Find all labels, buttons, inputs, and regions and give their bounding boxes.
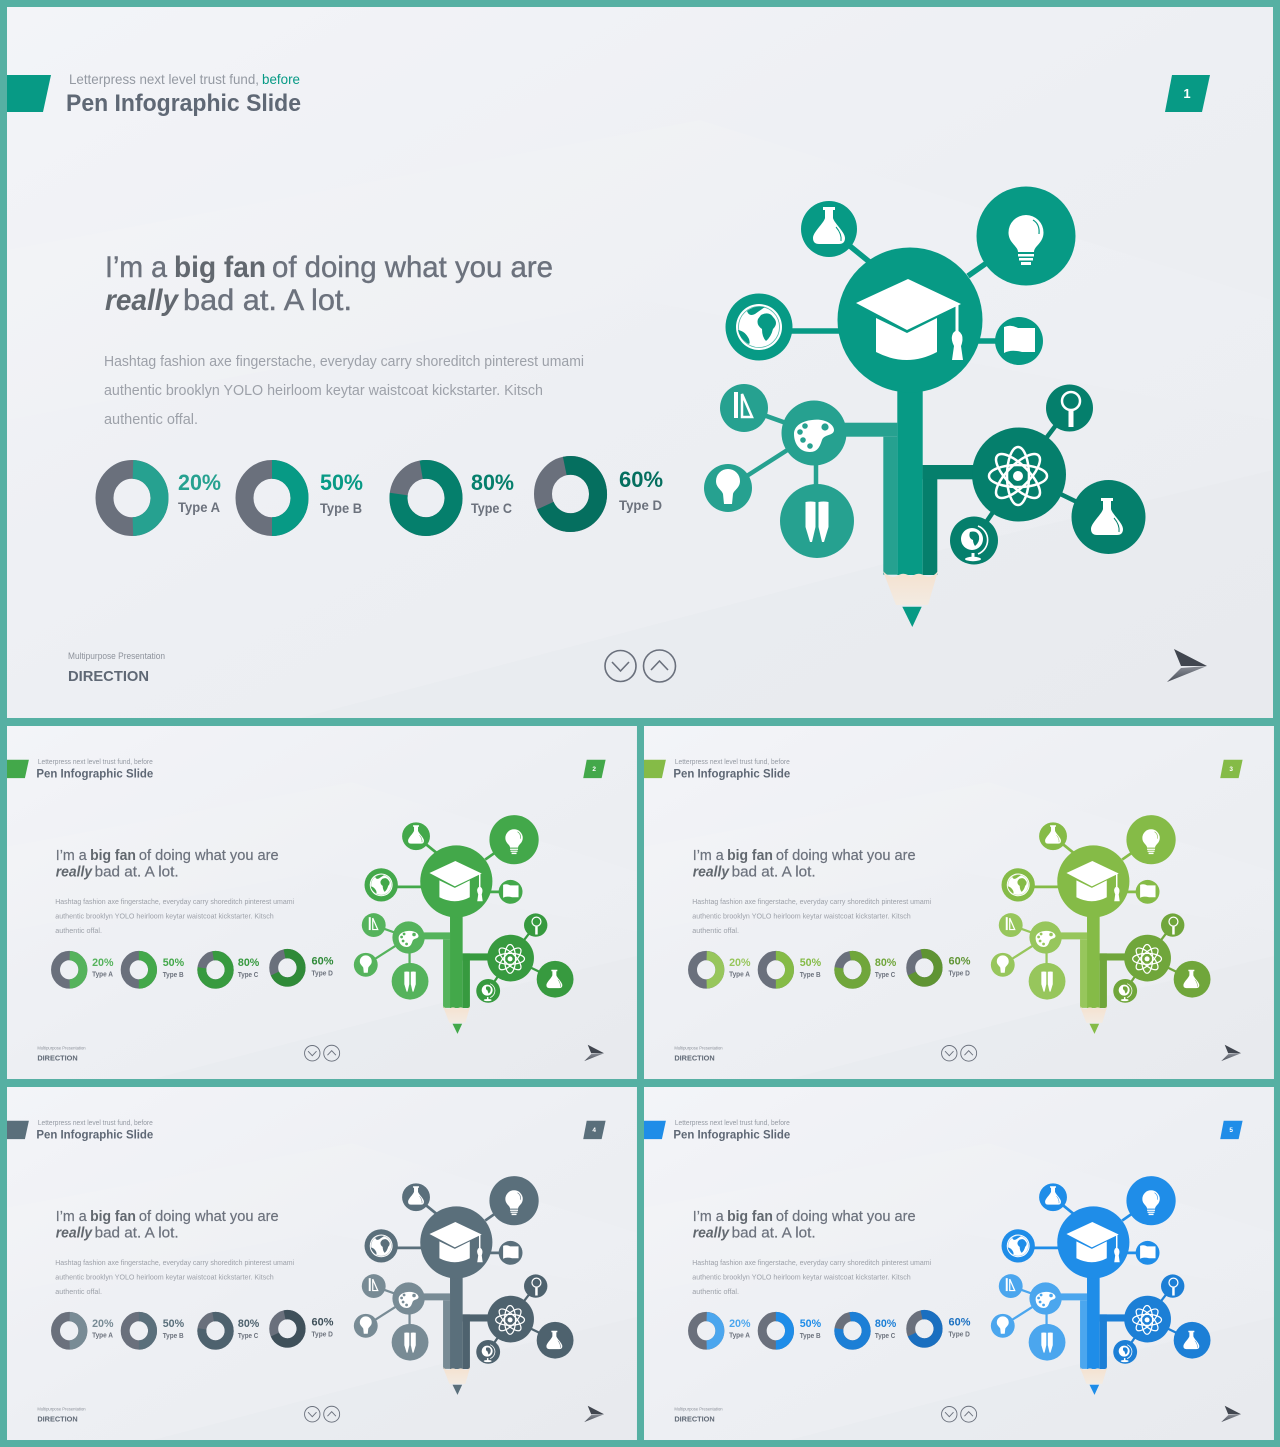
slide 2 footer label: DIRECTION: [37, 1054, 78, 1063]
slide 4 donut B: [125, 1317, 184, 1345]
slide 1 body text: authentic brooklyn YOLO heirloom keytar waistcoat kickstarter. Kitsch: [104, 382, 543, 399]
slide 2 footer label: Multipurpose Presentation: [37, 1046, 86, 1051]
slide 1 donut B: 50%: [320, 470, 363, 495]
slide 1 donut C: [394, 465, 514, 531]
slide 2 donut C: [200, 953, 260, 986]
slide 2 donut B: [125, 956, 184, 984]
slide 5 subtitle: Letterpress next level trust fund, before: [675, 1120, 790, 1127]
slide 4 heading: big fan: [90, 1209, 136, 1225]
slide 3 body text: authentic offal.: [692, 926, 739, 935]
icon: pens: [780, 484, 854, 558]
slide 5 heading: [693, 1209, 916, 1241]
slide 1 heading: really: [105, 284, 179, 317]
slide 2 heading: big fan: [90, 848, 136, 864]
slide 1 body text: authentic offal.: [104, 411, 198, 428]
slide 4 footer label: Multipurpose Presentation: [37, 1407, 86, 1412]
slide 3 pencil tree diagram: [991, 815, 1211, 1034]
slide 4 body text: Hashtag fashion axe fingerstache, everyday carry shoreditch pinterest umami: [55, 1258, 294, 1267]
slide 4 background: [7, 1087, 637, 1440]
slide 5 pencil tree diagram: [991, 1176, 1211, 1395]
slide 5 donut B: 50%: [800, 1318, 821, 1330]
pencil body: [843, 380, 978, 575]
slide 3 heading: bad at. A lot.: [732, 864, 816, 880]
slide 3 page number: 3: [1229, 766, 1233, 773]
slide 4 header tab: [7, 1121, 29, 1139]
slide 3 heading: really: [693, 864, 730, 880]
icon: rulers: [720, 384, 768, 432]
slide 2 body text: [55, 897, 294, 935]
slide 2 heading: I’m a: [56, 848, 87, 864]
slide 1 donut D: [538, 460, 663, 528]
slide 3 donut D: [908, 951, 971, 985]
slide 1 background: [7, 7, 1273, 718]
slide 2 donut B: Type B: [163, 972, 184, 979]
slide 5 footer label: [674, 1407, 723, 1424]
slide 1 body text: [104, 353, 584, 428]
slide 1 donut D: Type D: [619, 497, 662, 513]
slide 5 header tab: [644, 1121, 666, 1139]
slide 5 heading: really: [693, 1225, 730, 1241]
slide 2 title: Pen Infographic Slide: [36, 767, 154, 781]
slide 5 body text: authentic brooklyn YOLO heirloom keytar waistcoat kickstarter. Kitsch: [692, 1273, 911, 1282]
slide 3 donut B: Type B: [800, 972, 821, 979]
slide 2 page number: [583, 760, 606, 778]
slide 3 donut C: 80%: [875, 957, 897, 969]
slide 3 header tab: [644, 760, 666, 778]
slide 5 donut A: [692, 1316, 751, 1345]
slide 3 footer label: Multipurpose Presentation: [674, 1046, 723, 1051]
slide 4 footer label: [37, 1407, 86, 1424]
slide 3 title: Pen Infographic Slide: [673, 767, 791, 781]
slide 4 body text: [55, 1258, 294, 1296]
slide 3 donut C: [837, 953, 897, 986]
slide 1 donut C: Type C: [471, 500, 512, 516]
slide 4 donut B: Type B: [163, 1333, 184, 1340]
slide 3 heading: [693, 848, 916, 880]
slide 4 body text: authentic offal.: [55, 1287, 102, 1296]
slide 3 background: [644, 726, 1274, 1079]
slide 2 paper plane logo: [584, 1045, 604, 1061]
slide 1 page number: [1165, 75, 1210, 112]
slide 5 body text: authentic offal.: [692, 1287, 739, 1296]
slide 2 donut D: 60%: [312, 955, 334, 967]
slide 1 footer label: [68, 651, 165, 685]
slide 2 donut A: 20%: [92, 957, 114, 969]
slide 4 body text: authentic brooklyn YOLO heirloom keytar waistcoat kickstarter. Kitsch: [55, 1273, 274, 1282]
icon: palette: [782, 400, 846, 466]
slide 2 body text: Hashtag fashion axe fingerstache, everyday carry shoreditch pinterest umami: [55, 897, 294, 906]
slide 4 pencil tree diagram: [354, 1176, 574, 1395]
slide 1 donut A: Type A: [178, 499, 220, 515]
slide 5 donut A: 20%: [729, 1318, 751, 1330]
slide 1 page number: 1: [1183, 86, 1191, 101]
slide 3 donut C: Type C: [875, 972, 895, 979]
slide 1 body text: Hashtag fashion axe fingerstache, everyday carry shoreditch pinterest umami: [104, 353, 584, 370]
slide 5 footer label: DIRECTION: [674, 1415, 715, 1424]
slide 4 donut C: [200, 1314, 260, 1347]
slide 2 donut D: Type D: [312, 971, 333, 978]
icon: desk globe: [950, 516, 998, 564]
slide 3 footer label: [674, 1046, 723, 1063]
slide 1: teal: [7, 7, 1273, 718]
slide 1 donut B: [244, 469, 363, 527]
slide 5: blue: [644, 1087, 1274, 1440]
slide 3 body text: Hashtag fashion axe fingerstache, everyday carry shoreditch pinterest umami: [692, 897, 931, 906]
slide 5 donut B: Type B: [800, 1333, 821, 1340]
slide 4 donut A: 20%: [92, 1318, 114, 1330]
icon: flask large: [1072, 480, 1146, 554]
slide 3 donut A: Type A: [729, 972, 750, 979]
slide 4 heading: [56, 1209, 279, 1241]
slide 4 heading: really: [56, 1225, 93, 1241]
slide 4 nav arrows: [305, 1406, 340, 1422]
slide 1 subtitle: before: [262, 71, 300, 87]
slide 5 donut D: Type D: [949, 1332, 970, 1339]
slide 2 background: [7, 726, 637, 1079]
slide 2 heading: bad at. A lot.: [95, 864, 179, 880]
slide 2 donut B: 50%: [163, 957, 184, 969]
slide 2 pencil tree diagram: [354, 815, 574, 1034]
slide 1 heading: of doing what you are: [272, 251, 553, 284]
slide 4 donut A: [55, 1316, 114, 1345]
slide 3 subtitle: Letterpress next level trust fund, before: [675, 759, 790, 766]
slide 2 body text: authentic brooklyn YOLO heirloom keytar waistcoat kickstarter. Kitsch: [55, 912, 274, 921]
slide 3 heading: big fan: [727, 848, 773, 864]
slide 2 nav arrows: [305, 1045, 340, 1061]
slide 5 background: [644, 1087, 1274, 1440]
slide 4 heading: of doing what you are: [139, 1209, 279, 1225]
slide 3 page number: [1220, 760, 1243, 778]
slide 1 donut C: 80%: [471, 470, 514, 495]
slide 1 pencil tree diagram: [704, 186, 1146, 627]
slide 3 nav arrows: [942, 1045, 977, 1061]
slide 1 header tab: [7, 75, 51, 112]
slide 3 donut D: 60%: [949, 955, 971, 967]
slide 4 subtitle: Letterpress next level trust fund, before: [38, 1120, 153, 1127]
slide 4: slate: [7, 1087, 637, 1440]
slide 5 donut D: [908, 1312, 971, 1346]
slide 2 donut D: [271, 951, 334, 985]
slide 5 title: Pen Infographic Slide: [673, 1128, 791, 1142]
slide 4 donut C: 80%: [238, 1318, 260, 1330]
slide 5 footer label: Multipurpose Presentation: [674, 1407, 723, 1412]
slide 1 paper plane logo: [1167, 649, 1207, 682]
connector lines: [728, 229, 1108, 540]
slide 5 donut D: 60%: [949, 1316, 971, 1328]
slide 5 donut C: [837, 1314, 897, 1347]
slide 4 donut A: Type A: [92, 1333, 113, 1340]
slide 4 paper plane logo: [584, 1406, 604, 1422]
slide 5 page number: 5: [1229, 1127, 1233, 1134]
slide 4 heading: I’m a: [56, 1209, 87, 1225]
slide 2 donut A: Type A: [92, 972, 113, 979]
icon: small bulb: [704, 464, 752, 512]
slide 5 donut B: [762, 1317, 821, 1345]
slide 1 heading: [105, 251, 553, 317]
slide 2 heading: [56, 848, 279, 880]
slide 3 donut A: [692, 955, 751, 984]
slide 5 body text: [692, 1258, 931, 1296]
slide 4 donut D: Type D: [312, 1332, 333, 1339]
slide 1 footer label: Multipurpose Presentation: [68, 651, 165, 661]
slide 3 donut A: 20%: [729, 957, 751, 969]
slide 2 header tab: [7, 760, 29, 778]
slide 5 nav arrows: [942, 1406, 977, 1422]
slide 2 heading: of doing what you are: [139, 848, 279, 864]
slide 1 donut A: 20%: [178, 470, 221, 495]
slide 4 footer label: DIRECTION: [37, 1415, 78, 1424]
slide 5 heading: big fan: [727, 1209, 773, 1225]
slide 2 donut A: [55, 955, 114, 984]
slide 5 donut C: Type C: [875, 1333, 895, 1340]
slide 1 donut D: 60%: [619, 467, 663, 492]
slide 2 body text: authentic offal.: [55, 926, 102, 935]
slide 5 paper plane logo: [1221, 1406, 1241, 1422]
slide 3 body text: [692, 897, 931, 935]
slide 1 footer label: DIRECTION: [68, 668, 149, 685]
slide 4 heading: bad at. A lot.: [95, 1225, 179, 1241]
slide 2 donut C: Type C: [238, 972, 258, 979]
slide 3: light green: [644, 726, 1274, 1079]
slide 4 donut D: [271, 1312, 334, 1346]
slide 3 donut D: Type D: [949, 971, 970, 978]
pencil tip: [883, 571, 938, 627]
slide 1 subtitle: Letterpress next level trust fund,: [69, 71, 259, 87]
slide 4 donut B: 50%: [163, 1318, 184, 1330]
icon: magnifier: [1046, 384, 1093, 432]
slide 1 heading: big fan: [174, 251, 266, 284]
slide 1 heading: bad at. A lot.: [183, 284, 352, 317]
slide 4 donut D: 60%: [312, 1316, 334, 1328]
graduation cap circle: [838, 248, 982, 392]
slide 3 donut B: 50%: [800, 957, 821, 969]
slide 2: green: [7, 726, 637, 1079]
icon: atom: [972, 428, 1066, 522]
slide 4 page number: 4: [592, 1127, 596, 1134]
slide 3 footer label: DIRECTION: [674, 1054, 715, 1063]
slide 5 donut C: 80%: [875, 1318, 897, 1330]
slide 5 page number: [1220, 1121, 1243, 1139]
slide 2 footer label: [37, 1046, 86, 1063]
icon: globe: [726, 294, 792, 360]
slide 3 body text: authentic brooklyn YOLO heirloom keytar waistcoat kickstarter. Kitsch: [692, 912, 911, 921]
slide 3 heading: of doing what you are: [776, 848, 916, 864]
slide 1 nav arrows: [605, 650, 676, 682]
slide 1 donut A: [104, 468, 221, 528]
slide 5 heading: bad at. A lot.: [732, 1225, 816, 1241]
icon: book: [995, 317, 1043, 365]
slide 4 donut C: Type C: [238, 1333, 258, 1340]
slide 2 heading: really: [56, 864, 93, 880]
slide 5 body text: Hashtag fashion axe fingerstache, everyday carry shoreditch pinterest umami: [692, 1258, 931, 1267]
slide 2 page number: 2: [592, 766, 596, 773]
slide 5 donut A: Type A: [729, 1333, 750, 1340]
icon: flask: [801, 201, 857, 257]
slide 2 donut C: 80%: [238, 957, 260, 969]
slide 1 donut B: Type B: [320, 500, 362, 516]
slide 2 subtitle: Letterpress next level trust fund, before: [38, 759, 153, 766]
slide 5 heading: I’m a: [693, 1209, 724, 1225]
slide 3 donut B: [762, 956, 821, 984]
slide 3 paper plane logo: [1221, 1045, 1241, 1061]
slide 1 title: Pen Infographic Slide: [66, 90, 301, 117]
slide 3 heading: I’m a: [693, 848, 724, 864]
icon: light bulb: [976, 186, 1076, 286]
slide 5 heading: of doing what you are: [776, 1209, 916, 1225]
slide 4 page number: [583, 1121, 606, 1139]
slide 1 heading: I’m a: [105, 251, 167, 284]
slide 4 title: Pen Infographic Slide: [36, 1128, 154, 1142]
